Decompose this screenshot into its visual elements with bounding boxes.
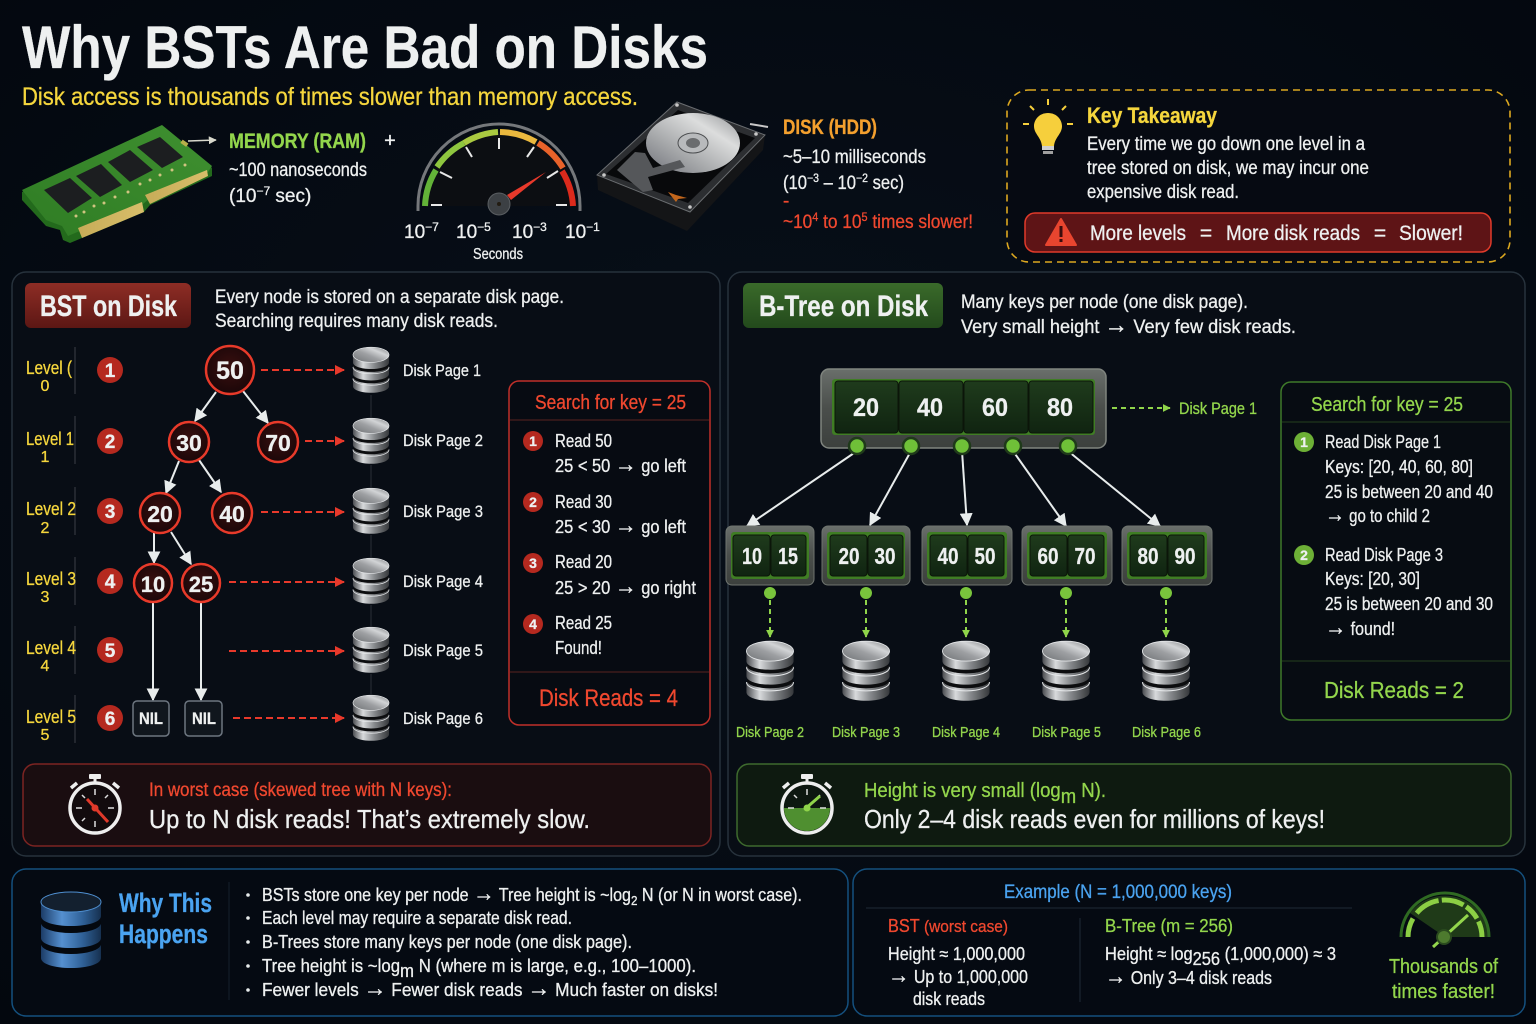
- panel: B-Tree search steps: [1281, 382, 1511, 720]
- level labels: 5: [41, 727, 50, 744]
- level labels: 3: [41, 589, 50, 606]
- heading: why this happens: Happens: [119, 919, 208, 949]
- callout: B-Tree height: Height is very small (log: [864, 780, 1076, 802]
- gauge: access time in seconds: 10: [512, 222, 533, 243]
- level step numbers: 1: [105, 361, 116, 382]
- panel: why this happens: [12, 869, 848, 1016]
- icon: light bulb: [1023, 99, 1073, 154]
- panel: B-Tree search steps: Keys: [20, 30]: [1325, 569, 1420, 589]
- list: reasons: N (or N in worst case).: [637, 885, 802, 905]
- disk info text: −3: [807, 171, 819, 185]
- panel: B-Tree search steps: Search for key = 25: [1311, 394, 1463, 416]
- level labels: 1: [41, 449, 50, 466]
- disk info text: – 10: [819, 173, 856, 194]
- panel: BST search steps: 1: [529, 433, 537, 449]
- memory info text: ~100 nanoseconds: [229, 160, 367, 181]
- heading: B-Tree on Disk: B-Tree on Disk: [759, 290, 928, 323]
- callout: B-Tree height: [737, 764, 1511, 846]
- BST example: Height ≈ 1,000,000: [888, 944, 1025, 964]
- panel: BST search steps: Read 30: [555, 492, 612, 512]
- callout: more levels banner: [1025, 213, 1491, 252]
- level labels: 4: [41, 658, 50, 675]
- level labels: Level 3: [26, 569, 76, 589]
- level step numbers: 5: [105, 641, 116, 662]
- level labels: Level (: [26, 358, 72, 378]
- B-tree leaf nodes: 20: [838, 543, 860, 569]
- gauge: access time in seconds: 10: [404, 222, 425, 243]
- level labels: 0: [41, 378, 50, 395]
- binary search tree: NIL: [192, 709, 216, 728]
- gauge: access time in seconds: −1: [586, 220, 600, 234]
- disk info text: to 10: [818, 212, 861, 233]
- B-tree disk pages: [736, 587, 1201, 741]
- B-tree disk pages: Disk Page 5: [1032, 724, 1101, 741]
- B-tree root node: 80: [1047, 394, 1073, 422]
- B-Tree example: → Only 3–4 disk reads: [1105, 963, 1272, 990]
- gauge: access time in seconds: Seconds: [473, 246, 523, 263]
- memory info text: −7: [256, 184, 270, 198]
- list: reasons: Fewer levels → Fewer disk reads → Much faster on disks!: [262, 975, 718, 1002]
- list: reasons: 2: [631, 893, 637, 908]
- B-Tree example: (1,000,000) ≈ 3: [1220, 944, 1336, 964]
- disk info text: [783, 116, 973, 233]
- B-Tree example: [1105, 916, 1336, 990]
- link to disk page 1: Disk Page 1: [1179, 399, 1257, 418]
- text: BST description: Searching requires many disk reads.: [215, 311, 498, 332]
- disk info text: 5: [861, 210, 868, 224]
- text: thousands of times faster: times faster!: [1392, 981, 1495, 1003]
- B-tree leaf nodes: 15: [778, 543, 798, 569]
- binary search tree: 10: [141, 572, 165, 597]
- B-tree leaf nodes: 40: [938, 543, 958, 569]
- BST example: → Up to 1,000,000: [888, 962, 1028, 989]
- disk pages column: Disk Page 4: [403, 572, 483, 591]
- memory info text: +: [384, 130, 396, 152]
- panel: BST search steps: Read 25: [555, 613, 612, 633]
- gauge: access time in seconds: 10: [456, 222, 477, 243]
- B-Tree example: Height ≈ log: [1105, 944, 1201, 964]
- binary search tree: 40: [219, 501, 245, 527]
- disk info text: −2: [856, 171, 868, 185]
- panel: B-Tree search steps: 25 is between 20 and 30: [1325, 594, 1493, 614]
- B-tree root node: 20: [853, 394, 879, 422]
- level labels: Level 2: [26, 499, 76, 519]
- B-tree leaf nodes: 30: [874, 543, 896, 569]
- panel: key takeaway: Every time we go down one level in a: [1087, 134, 1365, 155]
- panel: B-Tree search steps: 1: [1300, 434, 1308, 450]
- list: reasons: Each level may require a separate disk read.: [262, 908, 572, 928]
- binary search tree: 20: [147, 501, 173, 527]
- disk info text: -: [783, 191, 789, 212]
- panel: key takeaway: tree stored on disk, we may incur one: [1087, 158, 1369, 179]
- BST example: [888, 916, 1028, 1009]
- level labels: [26, 347, 76, 744]
- disk info text: (10: [783, 173, 810, 194]
- icon: RAM module: [22, 125, 216, 243]
- panel: BST search steps: Found!: [555, 638, 602, 658]
- panel: B-Tree search steps: Read Disk Page 1: [1325, 432, 1441, 452]
- B-tree disk pages: Disk Page 3: [832, 724, 900, 741]
- gauge: access time in seconds: −7: [425, 220, 439, 234]
- level step numbers: 6: [105, 709, 115, 730]
- panel: key takeaway: Key Takeaway: [1087, 103, 1218, 128]
- icon: stopwatch red: [70, 774, 120, 833]
- text: thousands of times faster: [1389, 956, 1498, 1003]
- B-tree leaf nodes: [726, 526, 1212, 585]
- panel: BST search steps: Read 50: [555, 431, 612, 451]
- B-tree root node: [821, 369, 1106, 454]
- text: B-Tree description: Very small height → Very few disk reads.: [961, 311, 1296, 339]
- subtitle: Disk access is thousands of times slower than memory access.: [22, 83, 638, 111]
- disk pages column: [353, 347, 483, 741]
- B-tree leaf nodes: 10: [742, 543, 762, 569]
- icon: green speed gauge: [1401, 893, 1489, 947]
- disk info text: DISK (HDD): [783, 116, 877, 139]
- BST example: disk reads: [913, 989, 985, 1009]
- memory info text: MEMORY (RAM): [229, 130, 366, 153]
- list: reasons: m: [400, 961, 414, 981]
- binary search tree: 25: [189, 572, 213, 597]
- B-tree disk pages: Disk Page 6: [1132, 724, 1201, 741]
- panel: BST search steps: Search for key = 25: [535, 392, 686, 414]
- memory info text: sec): [270, 186, 311, 207]
- icon: database: [41, 892, 101, 968]
- gauge: access time in seconds: [404, 124, 600, 263]
- panel: B-Tree search steps: Disk Reads = 2: [1324, 677, 1464, 703]
- callout: B-Tree height: N).: [1076, 780, 1106, 802]
- disk info text: ~5–10 milliseconds: [783, 147, 926, 168]
- panel: BST search steps: 25 > 20 → go right: [555, 573, 696, 600]
- level labels: Level 5: [26, 707, 76, 727]
- list: reasons: BSTs store one key per node → Tree height is ~log: [262, 880, 647, 907]
- binary search tree: 50: [216, 357, 244, 385]
- disk pages column: Disk Page 5: [403, 641, 483, 660]
- binary search tree: 30: [176, 430, 202, 456]
- icon: hard disk drive: [597, 102, 768, 231]
- level labels: 2: [41, 520, 50, 537]
- level labels: Level 4: [26, 638, 76, 658]
- gauge: access time in seconds: 10: [565, 222, 586, 243]
- callout: B-Tree height: m: [1061, 786, 1076, 808]
- memory info text: [229, 130, 396, 207]
- binary search tree: NIL: [139, 709, 163, 728]
- callout: more levels banner: Slower!: [1399, 222, 1463, 245]
- callout: BST worst case: [23, 764, 711, 846]
- callout: more levels banner: More disk reads: [1226, 222, 1360, 245]
- panel: B-Tree search steps: Read Disk Page 3: [1325, 545, 1443, 565]
- panel: B-Tree search steps: 25 is between 20 and 40: [1325, 482, 1493, 502]
- title: Why BSTs Are Bad on Disks: [22, 14, 708, 81]
- panel: BST on disk: [12, 272, 720, 856]
- panel: key takeaway: expensive disk read.: [1087, 182, 1239, 203]
- level step numbers: [97, 357, 123, 731]
- disk info text: sec): [868, 173, 904, 194]
- panel: BST search steps: [509, 381, 710, 725]
- callout: B-Tree height: Only 2–4 disk reads even for millions of keys!: [864, 804, 1325, 834]
- gauge: access time in seconds: −5: [477, 220, 491, 234]
- level step numbers: 4: [105, 572, 116, 593]
- callout: more levels banner: More levels: [1090, 222, 1186, 245]
- text: B-Tree description: [961, 292, 1296, 339]
- panel: B-Tree search steps: Keys: [20, 40, 60, 80]: [1325, 457, 1473, 477]
- list: reasons: Tree height is ~log: [262, 956, 410, 976]
- B-Tree example: B-Tree (m = 256): [1105, 916, 1233, 936]
- binary search tree: [133, 346, 298, 736]
- level step numbers: 2: [105, 432, 115, 453]
- dashed links to disk pages: [229, 370, 344, 718]
- heading: why this happens: Why This: [119, 888, 212, 918]
- panel: BST search steps: Read 20: [555, 552, 612, 572]
- heading: BST on Disk: BST on Disk: [40, 290, 177, 323]
- level step numbers: 3: [105, 502, 115, 523]
- list: reasons: [246, 880, 802, 1002]
- list: reasons: B-Trees store many keys per node (one disk page).: [262, 932, 632, 952]
- disk info text: times slower!: [868, 212, 973, 233]
- icon: stopwatch green: [782, 774, 832, 833]
- list: reasons: N (where m is large, e.g., 100–1000).: [414, 956, 696, 976]
- disk info text: ~10: [783, 212, 815, 233]
- panel: BST search steps: 4: [529, 616, 537, 632]
- panel: BST search steps: 25 < 30 → go left: [555, 512, 686, 539]
- text: BST description: [215, 287, 564, 332]
- text: BST description: Every node is stored on a separate disk page.: [215, 287, 564, 308]
- panel: B-Tree on disk: [726, 272, 1525, 856]
- callout: BST worst case: Up to N disk reads! That’s extremely slow.: [149, 804, 590, 834]
- B-Tree example: 256: [1193, 949, 1220, 969]
- panel: BST search steps: 25 < 50 → go left: [555, 451, 686, 478]
- text: thousands of times faster: Thousands of: [1389, 956, 1498, 978]
- B-tree disk pages: Disk Page 4: [932, 724, 1000, 741]
- B-tree leaf nodes: 60: [1038, 543, 1058, 569]
- level labels: Level 1: [26, 429, 74, 449]
- B-tree leaf nodes: 90: [1174, 543, 1196, 569]
- heading: why this happens: [119, 888, 212, 949]
- disk pages column: Disk Page 1: [403, 361, 481, 380]
- B-tree leaf nodes: 50: [974, 543, 996, 569]
- B-tree root node: 40: [917, 394, 943, 422]
- memory info text: (10: [229, 186, 256, 207]
- panel: B-Tree search steps: 2: [1300, 547, 1308, 563]
- panel: key takeaway: [1007, 90, 1510, 262]
- panel: BST search steps: 3: [529, 555, 537, 571]
- text: B-Tree description: Many keys per node (one disk page).: [961, 292, 1248, 313]
- disk info text: 4: [812, 210, 819, 224]
- heading: BST on Disk: [25, 283, 191, 328]
- callout: more levels banner: =: [1374, 222, 1386, 245]
- disk pages column: Disk Page 6: [403, 709, 483, 728]
- panel: B-Tree search steps: → found!: [1325, 614, 1395, 641]
- disk pages column: Disk Page 3: [403, 502, 483, 521]
- B-tree leaf nodes: 80: [1138, 543, 1158, 569]
- B-tree root node: 60: [982, 394, 1008, 422]
- panel: example: Example (N = 1,000,000 keys): [1004, 882, 1232, 903]
- callout: more levels banner: =: [1200, 222, 1212, 245]
- panel: BST search steps: Disk Reads = 4: [539, 685, 678, 712]
- disk pages column: Disk Page 2: [403, 431, 483, 450]
- panel: BST search steps: 2: [529, 494, 537, 510]
- callout: BST worst case: In worst case (skewed tree with N keys):: [149, 780, 452, 801]
- gauge: access time in seconds: −3: [533, 220, 547, 234]
- binary search tree: 70: [265, 430, 291, 456]
- heading: B-Tree on Disk: [743, 283, 943, 328]
- B-tree arrows: [747, 451, 1160, 526]
- BST example: BST (worst case): [888, 916, 1008, 936]
- B-tree leaf nodes: 70: [1074, 543, 1096, 569]
- B-tree disk pages: Disk Page 2: [736, 724, 804, 741]
- panel: B-Tree search steps: → go to child 2: [1325, 501, 1430, 528]
- panel: example: [853, 869, 1525, 1016]
